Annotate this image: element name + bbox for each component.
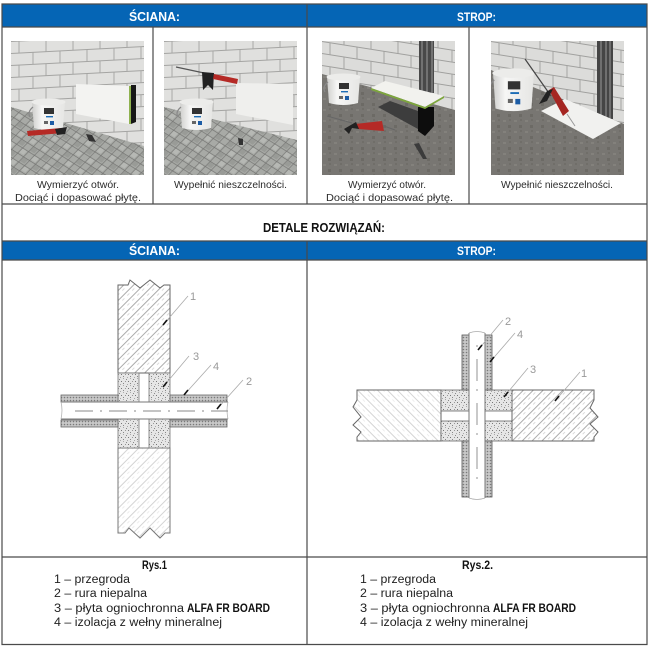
slab left section — [353, 390, 441, 441]
caption: ceiling step 1: Wymierzyć otwór. — [348, 179, 426, 191]
legend: figure 2: 3 – płyta ogniochronna — [360, 603, 491, 615]
caption: wall step 1: Wymierzyć otwór. — [37, 179, 119, 191]
callout 3 — [163, 351, 199, 387]
header: ceiling installation — [307, 4, 647, 27]
caption: ceiling step 2: Wypełnić nieszczelności. — [501, 179, 613, 191]
header: ceiling installation: STROP: — [457, 10, 496, 24]
caption: wall step 1 — [15, 179, 141, 204]
diagram: ceiling penetration detail — [353, 316, 598, 500]
legend: figure 2: 1 – przegroda — [360, 574, 437, 586]
legend: figure 1 — [54, 560, 270, 629]
legend: figure 2: 4 – izolacja z wełny mineralnej — [360, 617, 528, 629]
legend: figure 1: Rys.1 — [142, 560, 167, 572]
legend: figure 2 — [360, 560, 576, 629]
callout 2 — [478, 316, 511, 350]
callout 4: 4 — [213, 361, 219, 373]
caption: ceiling step 1: Dociąć i dopasować płytę. — [326, 192, 453, 204]
callout 1 — [163, 291, 196, 325]
legend: figure 1: 1 – przegroda — [54, 574, 131, 586]
callout 1 — [555, 368, 587, 401]
photo: ceiling step 2, fill the gaps — [489, 41, 624, 175]
callout 1: 1 — [581, 368, 587, 380]
mineral wool insulation — [61, 395, 227, 427]
caption: wall step 2: Wypełnić nieszczelności. — [174, 179, 287, 191]
legend: figure 2: ALFA FR BOARD — [493, 603, 576, 615]
header: wall installation: ŚCIANA: — [129, 9, 180, 24]
wall lower section — [118, 448, 170, 538]
callout 2 — [217, 376, 252, 409]
pipe — [469, 332, 485, 500]
callout 4 — [184, 361, 219, 395]
legend: figure 1: 3 – płyta ogniochronna — [54, 603, 185, 615]
slab right section — [512, 390, 598, 441]
header: ceiling detail — [307, 241, 647, 260]
legend: figure 1: ALFA FR BOARD — [187, 603, 270, 615]
callout 4 — [490, 329, 523, 362]
header: wall detail — [2, 241, 307, 260]
legend: figure 1: 4 – izolacja z wełny mineralnej — [54, 617, 222, 629]
photo: wall step 1, measure and fit the board — [11, 41, 144, 175]
fire board filler — [118, 373, 170, 448]
callout 2: 2 — [246, 376, 252, 388]
caption: ceiling step 1 — [326, 179, 453, 204]
callout 4: 4 — [517, 329, 523, 341]
callout 3 — [504, 364, 536, 397]
heading: solution details: DETALE ROZWIĄZAŃ: — [263, 220, 385, 235]
header: wall detail: ŚCIANA: — [129, 243, 180, 258]
diagram: wall penetration detail — [61, 280, 252, 538]
callout 1: 1 — [190, 291, 196, 303]
mineral wool insulation — [462, 335, 492, 497]
legend: figure 2: 2 – rura niepalna — [360, 588, 454, 600]
caption: wall step 1: Dociąć i dopasować płytę. — [15, 192, 141, 204]
photo: wall step 2, fill the gaps — [164, 41, 297, 175]
photo: ceiling step 1, measure and fit the board — [322, 41, 455, 175]
fire board filler — [441, 390, 512, 441]
callout 3: 3 — [193, 351, 199, 363]
wall upper section — [118, 280, 170, 373]
pipe — [61, 402, 228, 419]
callout 3: 3 — [530, 364, 536, 376]
header: wall installation — [2, 4, 307, 27]
legend: figure 1: 2 – rura niepalna — [54, 588, 148, 600]
callout 2: 2 — [505, 316, 511, 328]
legend: figure 2: Rys.2. — [462, 560, 493, 572]
header: ceiling detail: STROP: — [457, 244, 496, 258]
